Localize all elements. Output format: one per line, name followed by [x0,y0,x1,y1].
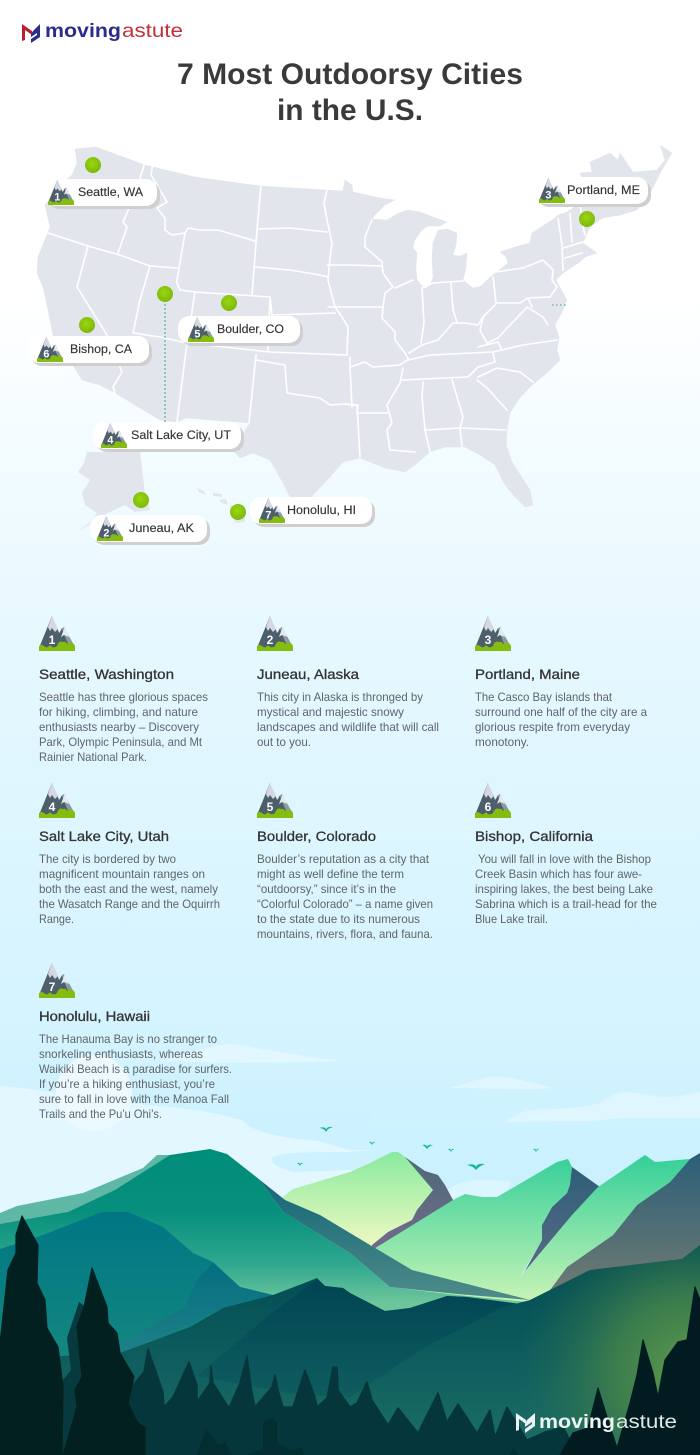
teal mountain [0,1212,273,1380]
text block: This city in Alaska is thronged by [257,690,423,704]
text block [475,690,647,749]
map label: Salt Lake City, UT: 4 [107,435,113,447]
map label: Juneau, AK: 2 [103,528,109,540]
text block: sure to fall in love with the Manoa Fall [39,1092,229,1106]
icon: mountain 7: 7 [49,980,56,994]
panel: Seattle, Washington [39,616,208,764]
map label: Honolulu, HI: Honolulu, HI [287,503,356,517]
text block: snorkeling enthusiasts, whereas [39,1047,203,1061]
small dashed mark near Delaware [552,304,568,306]
text block: “outdoorsy,” since it’s in the [257,882,396,896]
panel: Boulder, Colorado [257,783,433,941]
map label: Seattle, WA: Seattle, WA [78,185,144,199]
pale teal back slope [0,1155,180,1240]
map label: Honolulu, HI: 7 [265,510,271,522]
map label: Juneau, AK: Juneau, AK [129,521,195,535]
icon: mountain 6: 6 [485,800,492,814]
map label: Boulder, CO: Boulder, CO [217,322,284,336]
map label: Portland, ME: Portland, ME [567,183,640,197]
text block [475,852,657,926]
text block: surround one half of the city are a [475,705,647,719]
text block: mountains, rivers, flora, and fauna. [257,927,433,941]
text block: Range. [39,912,74,926]
map label: Seattle, WA: 1 [54,192,60,204]
front mountain dark ridge [197,1279,530,1397]
small foreground trees [197,1418,518,1455]
heading: Seattle, Washington [39,667,174,682]
icon: mountain 2 [257,616,293,651]
icon: mountain 3 [475,616,511,651]
title: 7 Most Outdoorsy Cities [177,58,523,91]
panel: Bishop, California [475,783,657,926]
text block: inspiring lakes, the best being Lake [475,882,653,896]
mid forest silhouette [128,1349,640,1455]
title: in the U.S. [277,94,423,127]
icon: mountain 5 [257,783,293,818]
heading: Bishop, California [475,829,593,844]
Hawaii islands [197,488,245,523]
text block: Sabrina which is a trail-head for the [475,897,657,911]
text block: enthusiasts nearby – Discovery [39,720,199,734]
tree behind left spire [57,1302,90,1455]
map label: Boulder, CO [178,316,303,346]
text block: “Colorful Colorado” – a name given [257,897,433,911]
map label: Juneau, AK [90,515,210,545]
icon: mountain 1: 1 [49,633,56,647]
text block: glorious respite from everyday [475,720,630,734]
map of the United States [37,145,672,532]
icon: mountain 4 [39,783,75,818]
bottom logo: astute [616,1411,677,1433]
text block: The city is bordered by two [39,852,176,866]
text block: If you’re a hiking enthusiast, you’re [39,1077,215,1091]
icon: mountain 1 [39,616,75,651]
text block: Blue Lake trail. [475,912,548,926]
landscape: layered mountains and forest [0,1149,700,1455]
far mountain, pale green [283,1152,433,1260]
text block [257,852,433,941]
right foreground trees [560,1287,700,1455]
text block: out to you. [257,735,311,749]
state borders [48,162,585,457]
front mountain [60,1245,700,1455]
map label: Bishop, CA: 6 [43,349,49,361]
map label: Bishop, CA [28,336,152,366]
logo: moving astute: astute [122,20,183,42]
heading: Boulder, Colorado [257,829,376,844]
text block [39,1032,232,1121]
right dark mountain [530,1153,700,1300]
second foreground spire [63,1268,145,1455]
heading: Salt Lake City, Utah [39,829,169,844]
dark wedge between peaks [520,1167,600,1280]
map label: Portland, ME [535,177,651,207]
text block: Park, Olympic Peninsula, and Mt [39,735,203,749]
text block: Waikiki Beach is a paradise for surfers. [39,1062,232,1076]
text block: monotony. [475,735,529,749]
map label: Seattle, WA [45,179,160,209]
map label: Boulder, CO: 5 [194,329,200,341]
text block: landscapes and wildlife that will call [257,720,439,734]
map label: Salt Lake City, UT: Salt Lake City, UT [131,428,231,442]
teal mountain inner fold [120,1263,273,1356]
panel: Salt Lake City, Utah [39,783,220,926]
icon: mountain 2: 2 [267,633,274,647]
text block: Rainier National Park. [39,750,147,764]
panel: Portland, Maine [475,616,647,749]
map label: Salt Lake City, UT [93,422,244,452]
main mountain shadow [260,1180,530,1300]
main green mountain [0,1149,527,1320]
title [177,58,523,127]
bottom logo [516,1411,677,1433]
icon: mountain 3: 3 [485,633,492,647]
marker dots [79,157,595,520]
text block [39,690,208,764]
heading: Honolulu, Hawaii [39,1009,150,1024]
text block: Creek Basin which has four awe- [475,867,642,881]
Alaska [77,452,150,532]
green light on right slope [500,1245,700,1455]
map label: Bishop, CA: Bishop, CA [70,342,133,356]
central green ridge [372,1155,690,1310]
left foreground spire [0,1216,63,1455]
icon: mountain 7 [39,963,75,998]
far mountain shadow [372,1157,460,1255]
text block: mystical and majestic snowy [257,705,404,719]
logo: moving astute: moving [45,20,121,42]
text block: might as well define the term [257,867,404,881]
dashed leader line: Salt Lake City [164,300,166,422]
text block [257,690,439,749]
icon: mountain 4: 4 [49,800,56,814]
heading: Juneau, Alaska [257,667,359,682]
text block: Boulder’s reputation as a city that [257,852,430,866]
birds [297,1127,539,1170]
icon: mountain 6 [475,783,511,818]
text block: magnificent mountain ranges on [39,867,205,881]
map label: Honolulu, HI [250,497,375,527]
panel: Honolulu, Hawaii [39,963,232,1121]
icon: mountain 5: 5 [267,800,274,814]
bottom logo: moving [539,1411,615,1433]
text block [39,852,220,926]
text block: You will fall in love with the Bishop [478,852,651,866]
clouds and moon [0,1044,700,1260]
map label: Portland, ME: 3 [545,190,551,202]
text block: The Casco Bay islands that [475,690,613,704]
text block: Seattle has three glorious spaces [39,690,208,704]
heading: Portland, Maine [475,667,580,682]
text block: to the state due to its numerous [257,912,420,926]
mainland [37,145,672,522]
text block: The Hanauma Bay is no stranger to [39,1032,217,1046]
text block: for hiking, climbing, and nature [39,705,198,719]
text block: both the east and the west, namely [39,882,218,896]
text block: the Wasatch Range and the Oquirrh [39,897,220,911]
text block: Trails and the Pu’u Ohi’s. [39,1107,162,1121]
logo: moving astute [22,20,183,43]
panel: Juneau, Alaska [257,616,439,749]
